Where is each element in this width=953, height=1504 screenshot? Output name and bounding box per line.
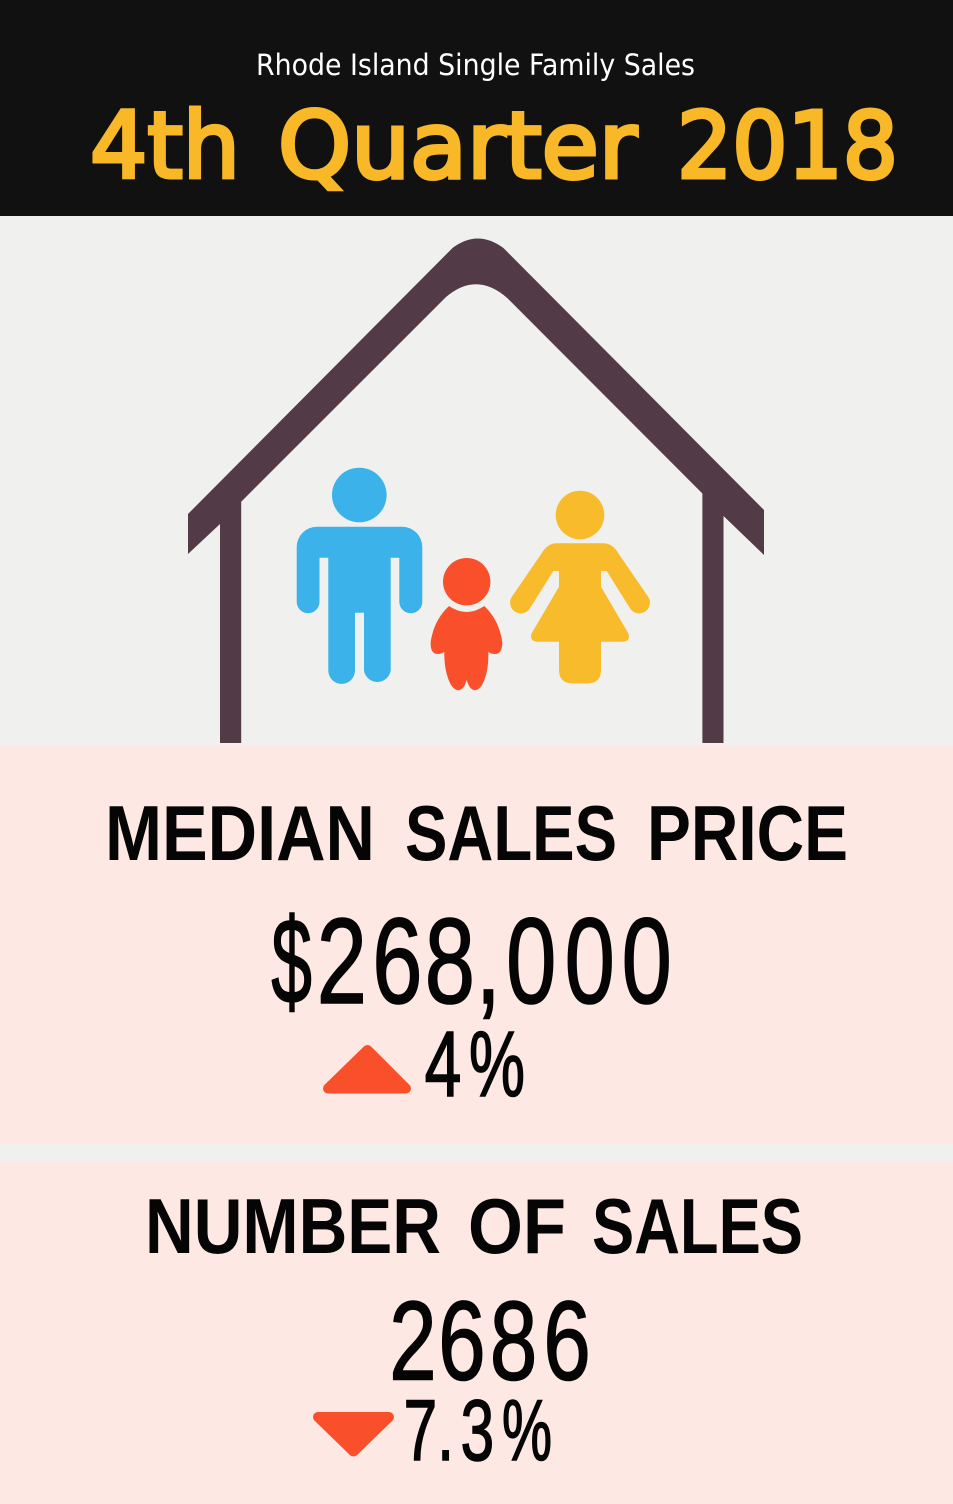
value: sales change: % [502, 1383, 552, 1479]
panel: median sales price [0, 746, 953, 1144]
value: price: $ [271, 894, 312, 1030]
heading: number of sales: OF [468, 1182, 566, 1270]
subtitle: Rhode Island Single Family Sales [256, 48, 695, 82]
heading: number of sales: SALES [592, 1182, 803, 1270]
heading: median sales price: PRICE [647, 789, 848, 877]
icon: mother [510, 491, 650, 684]
icon: child [431, 558, 502, 690]
heading: number of sales [145, 1182, 803, 1270]
icon: up arrow [328, 1050, 406, 1088]
header band [0, 0, 953, 216]
title: Quarter [278, 92, 637, 200]
icon: father [297, 468, 422, 684]
heading: median sales price [105, 789, 848, 877]
value: sales change: 7.3 [404, 1382, 494, 1479]
value: sales count: 2686 [389, 1279, 591, 1404]
value: price change: % [469, 1012, 525, 1116]
value: sales change [404, 1382, 552, 1479]
title: 4th [90, 92, 240, 200]
value: price change [425, 1012, 525, 1117]
heading: median sales price: MEDIAN [105, 789, 375, 877]
title: 2018 [677, 92, 898, 200]
heading: number of sales: NUMBER [145, 1182, 441, 1270]
panel: number of sales [0, 1161, 953, 1504]
value: price change: 4 [425, 1013, 461, 1117]
icon: house with family [188, 238, 764, 743]
heading: median sales price: SALES [405, 789, 617, 877]
title [90, 92, 898, 200]
value: price: 268,000 [317, 893, 672, 1029]
house outline [188, 238, 764, 743]
icon: down arrow [318, 1417, 389, 1452]
